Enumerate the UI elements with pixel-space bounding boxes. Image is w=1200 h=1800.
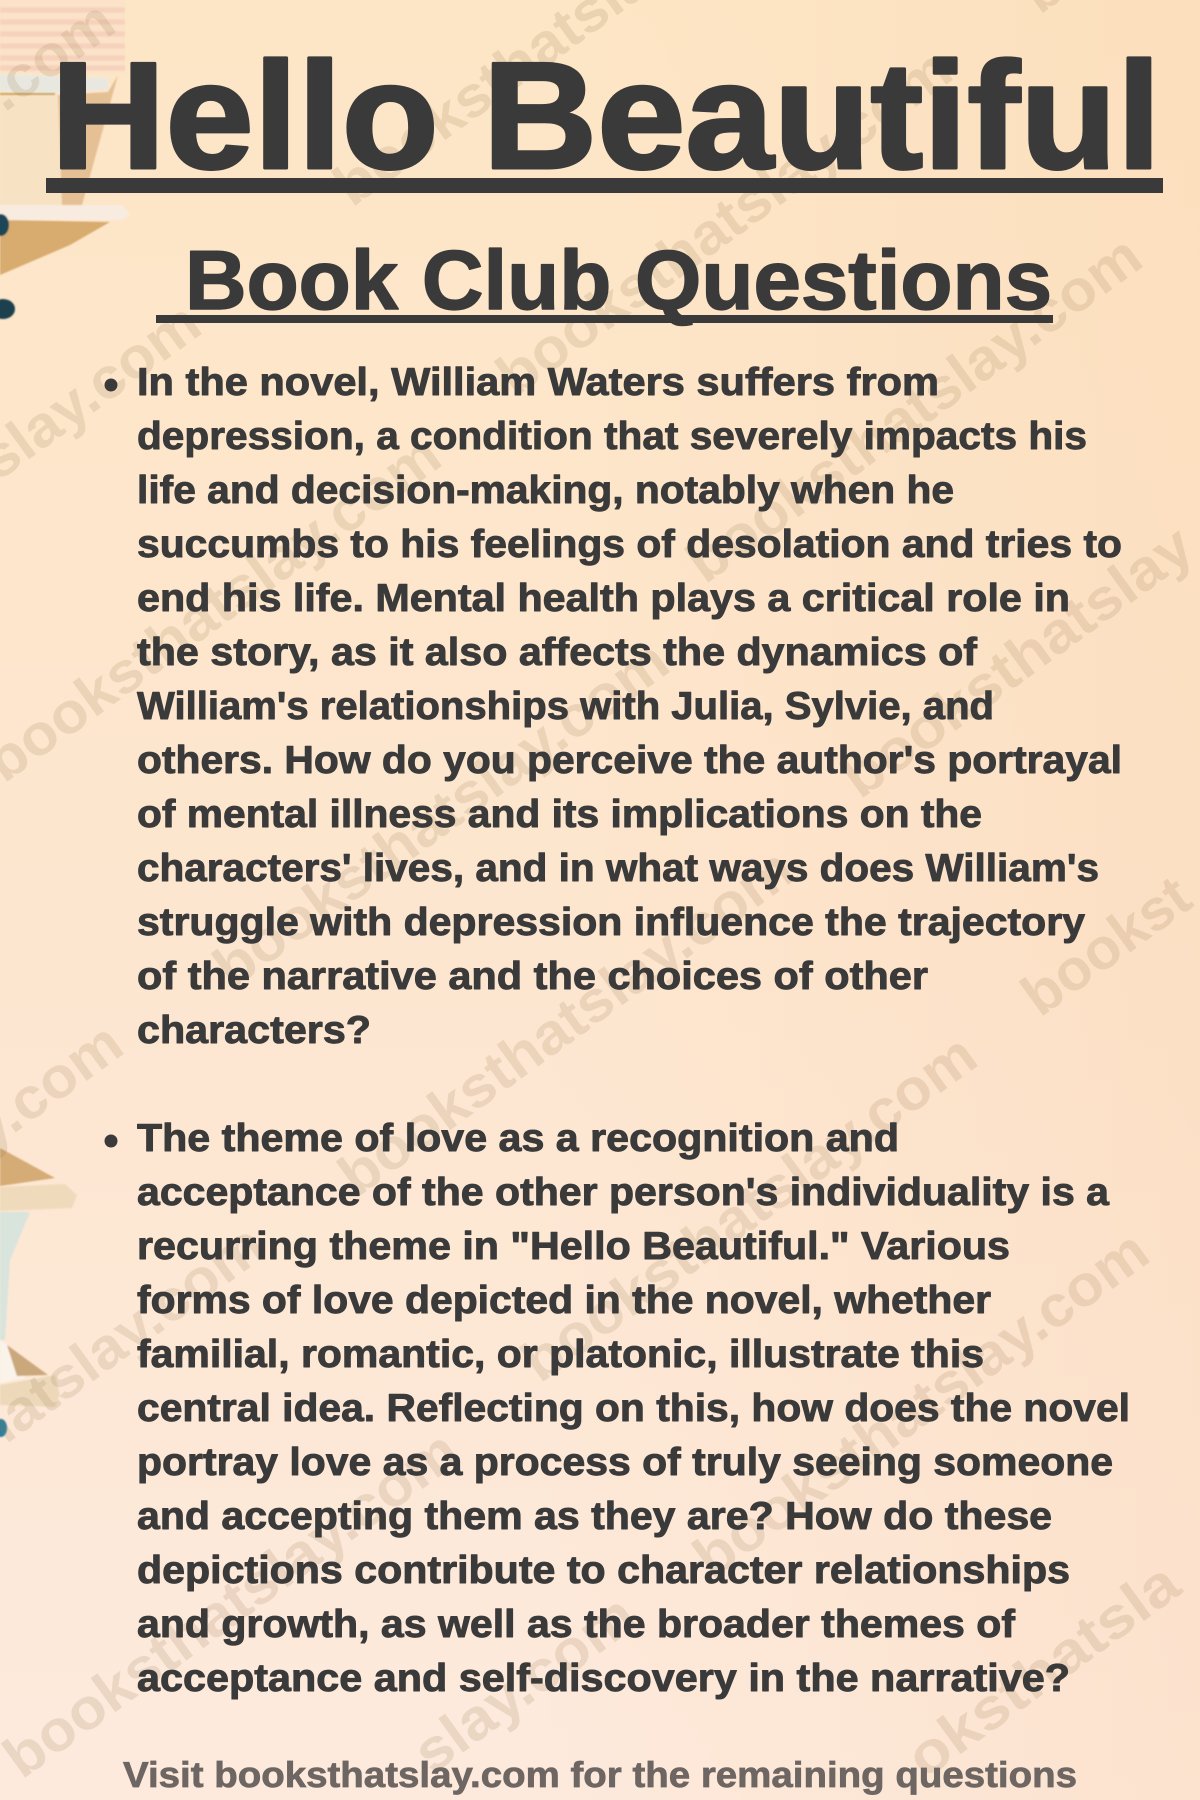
footer call to action: Visit booksthatslay.com for the remaining questions bbox=[123, 1754, 1077, 1795]
subtitle: Book Club Questions bbox=[185, 233, 1052, 327]
question 1 bullet text: life and decision-making, notably when he bbox=[137, 469, 954, 512]
watermark pattern: oksthatsla bbox=[894, 1549, 1192, 1791]
question 1 bullet text: characters? bbox=[137, 1009, 371, 1052]
watermark pattern: booksthatslay.com bbox=[484, 36, 964, 409]
question 1 bullet text: of the narrative and the choices of other bbox=[137, 955, 928, 998]
watermark pattern: booksthatslay.com bbox=[681, 1218, 1161, 1591]
watermark pattern: booksthatslay.com bbox=[326, 836, 806, 1209]
watermark pattern: slay.com bbox=[401, 1582, 648, 1786]
watermark pattern: booksthatslay.com bbox=[509, 1022, 989, 1395]
watermark pattern: booksthatslay.com bbox=[201, 628, 681, 1001]
question 2 bullet text: forms of love depicted in the novel, whether bbox=[137, 1279, 991, 1322]
question 2 bullet text: and growth, as well as the broader themes of bbox=[137, 1603, 1016, 1646]
question 1 bullet text: In the novel, William Waters suffers from bbox=[137, 361, 939, 404]
question 1 bullet text: struggle with depression influence the trajectory bbox=[137, 901, 1085, 944]
question 1 bullet text bbox=[104, 361, 1122, 1052]
question 2 bullet text: central idea. Reflecting on this, how does the novel bbox=[137, 1387, 1130, 1430]
watermark pattern: booksthatslay bbox=[829, 513, 1200, 811]
question 2 bullet text: portray love as a process of truly seeing someone bbox=[137, 1441, 1113, 1484]
question 2 bullet text: depictions contribute to character relationships bbox=[137, 1549, 1070, 1592]
question 2 bullet text: recurring theme in "Hello Beautiful." Various bbox=[137, 1225, 1010, 1268]
question 2 bullet text: and accepting them as they are? How do these bbox=[137, 1495, 1052, 1538]
question 1 bullet text: the story, as it also affects the dynamics of bbox=[137, 631, 978, 674]
question 1 bullet text: others. How do you perceive the author's portrayal bbox=[137, 739, 1122, 782]
question 2 bullet text: familial, romantic, or platonic, illustrate this bbox=[137, 1333, 984, 1376]
photo: top book stack at left edge bbox=[0, 0, 130, 319]
question 2 bullet text bbox=[104, 1117, 1130, 1700]
question 1 bullet text: end his life. Mental health plays a critical role in bbox=[137, 577, 1070, 620]
question 1 bullet text: characters' lives, and in what ways does William's bbox=[137, 847, 1099, 890]
photo: bottom book stack at left edge bbox=[0, 1148, 77, 1437]
question 2 bullet text: acceptance and self-discovery in the narrative? bbox=[137, 1657, 1070, 1700]
question 1 bullet text: of mental illness and its implications on the bbox=[137, 793, 982, 836]
watermark pattern: booksthatslay.com bbox=[674, 223, 1154, 596]
title: Hello Beautiful bbox=[51, 31, 1161, 201]
question 2 bullet text: acceptance of the other person's individuality is a bbox=[137, 1171, 1109, 1214]
question 1 bullet text: William's relationships with Julia, Sylvie, and bbox=[137, 685, 994, 728]
question 1 bullet text: succumbs to his feelings of desolation and tries to bbox=[137, 523, 1122, 566]
question 2 bullet text: The theme of love as a recognition and bbox=[137, 1117, 899, 1160]
watermark pattern: booksthatslay.com bbox=[0, 1418, 471, 1791]
watermark pattern: bookst bbox=[1009, 863, 1200, 1029]
question 1 bullet text: depression, a condition that severely impacts his bbox=[137, 415, 1087, 458]
